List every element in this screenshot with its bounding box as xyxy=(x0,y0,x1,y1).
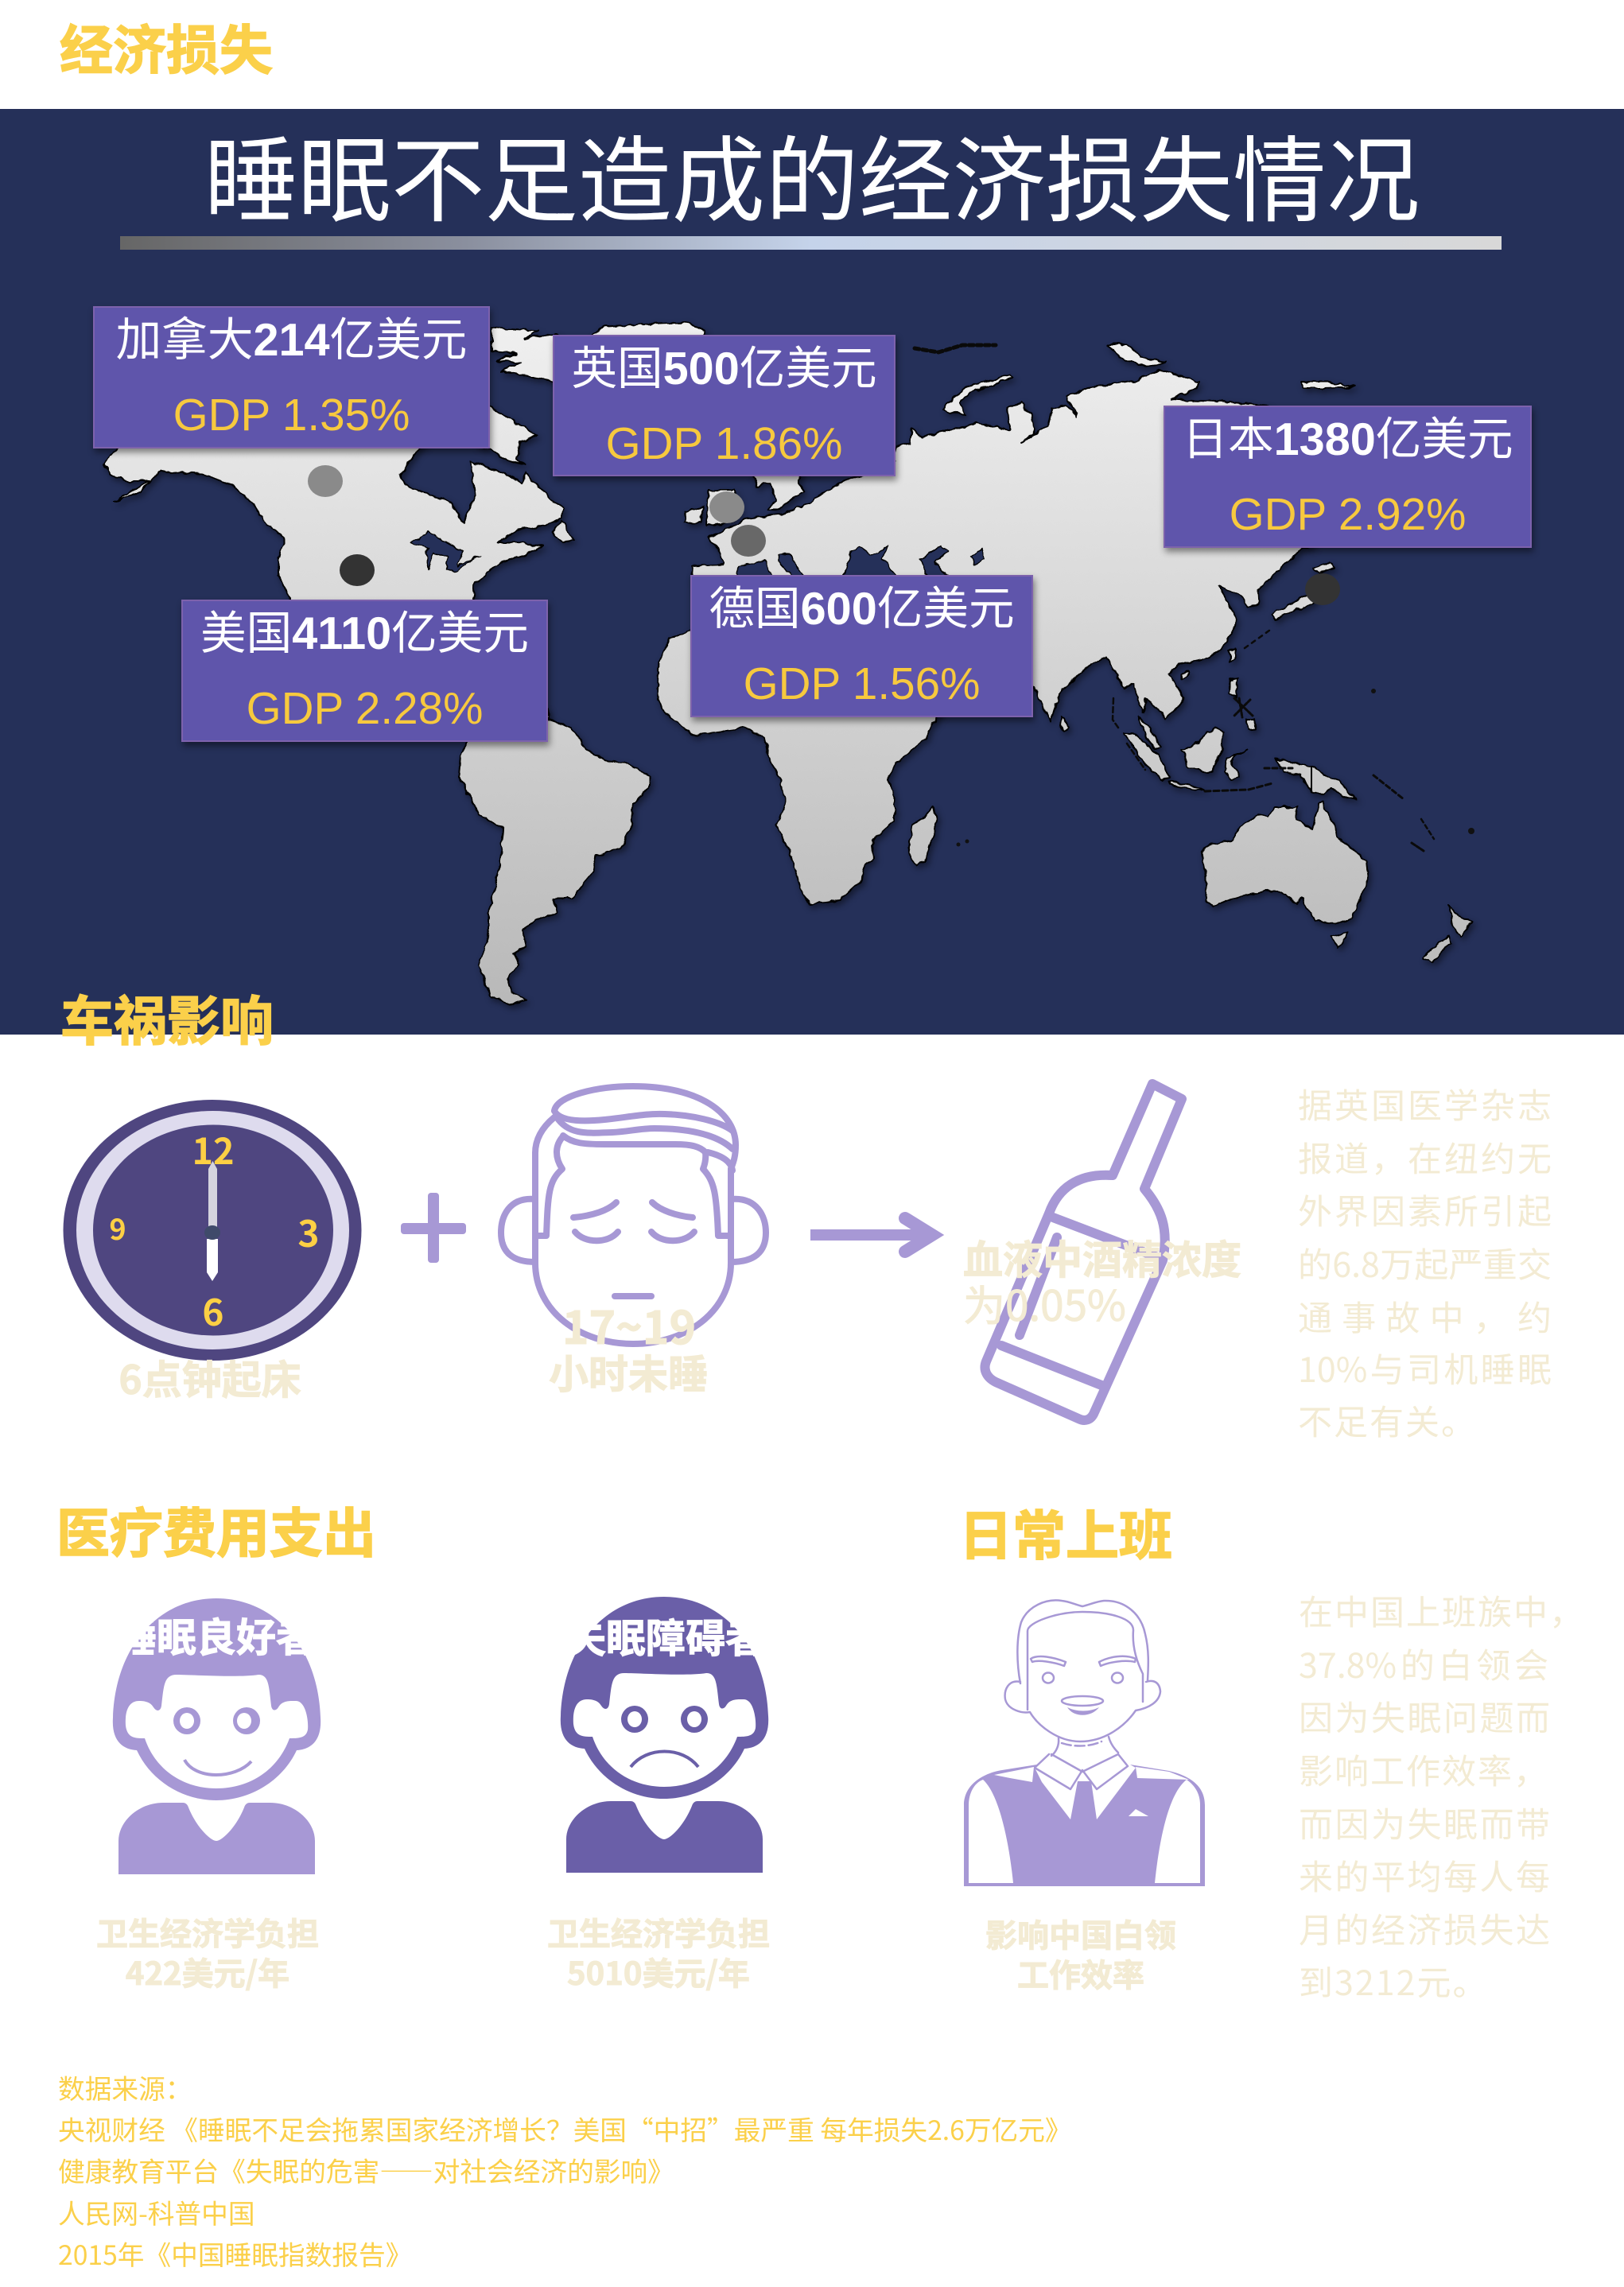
island: baffin xyxy=(477,406,538,465)
callout: japan: 日本1380亿美元 xyxy=(1182,414,1513,465)
continent: south america xyxy=(459,708,649,1004)
text block: british medical journal: 通事故中，约 xyxy=(1298,1291,1552,1341)
peninsula: malay xyxy=(1137,716,1160,749)
water: aral xyxy=(971,549,985,565)
icon: clock: 6 xyxy=(202,1284,224,1337)
text block: office workers: 因为失眠问题而 xyxy=(1299,1691,1550,1741)
label: office worker impact: 工作效率 xyxy=(1017,1950,1144,1996)
text block: office workers: 而因为失眠而带 xyxy=(1299,1798,1550,1847)
callout: germany xyxy=(690,575,1033,717)
continent: australia xyxy=(1202,802,1368,924)
callout: canada: 加拿大214亿美元 xyxy=(116,315,467,366)
callout: usa: 美国4110亿美元 xyxy=(200,608,529,659)
text: data sources heading: 数据来源： xyxy=(58,2068,192,2106)
text: source two: 健康教育平台《失眠的危害——对社会经济的影响》 xyxy=(58,2150,674,2189)
gradient divider bar xyxy=(120,236,1502,250)
label: hours awake number: 17~19 xyxy=(562,1292,696,1357)
callout: uk xyxy=(553,335,896,476)
island: new siberian xyxy=(1300,382,1356,388)
text block: british medical journal: 据英国医学杂志 xyxy=(1298,1079,1552,1128)
label: blood alcohol line two: 为0.05% xyxy=(963,1273,1126,1334)
icon: arrow xyxy=(810,1212,944,1258)
callout: uk: 英国500亿美元 xyxy=(571,344,877,394)
label: good sleeper cost: 422美元/年 xyxy=(126,1948,289,1994)
callout: japan: GDP 2.92% xyxy=(1230,489,1466,539)
small island dots xyxy=(956,689,1474,846)
label: blood alcohol line one: 血液中酒精浓度 xyxy=(963,1229,1241,1286)
water: black sea xyxy=(843,546,901,580)
water: caspian xyxy=(921,546,951,580)
label: office worker impact: 影响中国白领 xyxy=(985,1910,1176,1956)
border line: new guinea xyxy=(1311,766,1312,793)
island: severnaya xyxy=(1108,344,1166,367)
text block: office workers: 在中国上班族中， xyxy=(1299,1586,1585,1635)
continent: greenland xyxy=(491,328,557,382)
label: hours awake: 小时未睡 xyxy=(549,1343,708,1400)
label: insomniac: 失眠障碍者 xyxy=(566,1607,765,1664)
label: insomniac cost: 5010美元/年 xyxy=(567,1948,750,1994)
island: luzon xyxy=(1230,678,1237,697)
island chains: franz josef, indonesia, philippines, pacific xyxy=(915,345,1434,851)
label: office worker impact xyxy=(985,1910,1176,1996)
island: newfoundland xyxy=(552,521,574,542)
text: source three: 人民网-科普中国 xyxy=(58,2192,255,2231)
icon: wine bottle xyxy=(980,1079,1187,1425)
world map xyxy=(102,321,1476,1011)
icon: clock: 3 xyxy=(297,1206,320,1258)
text block: office workers xyxy=(1299,1586,1585,2005)
marker: germany xyxy=(731,525,766,557)
island: borneo xyxy=(1182,728,1223,773)
label: insomniac cost xyxy=(547,1908,770,1994)
callout: uk: GDP 1.86% xyxy=(606,418,842,468)
icon: tired face xyxy=(498,1083,769,1347)
marker: japan xyxy=(1305,573,1340,605)
marker: usa xyxy=(340,554,375,586)
heading: economic loss: 经济损失 xyxy=(60,8,273,85)
text block: office workers: 来的平均每人每 xyxy=(1299,1850,1550,1900)
text block: british medical journal: 10%与司机睡眠 xyxy=(1298,1343,1552,1392)
island: mindanao xyxy=(1246,718,1256,730)
island: new zealand south xyxy=(1423,936,1451,962)
icon: clock xyxy=(64,1100,361,1361)
heading: medical costs: 医疗费用支出 xyxy=(56,1491,376,1568)
island: ireland xyxy=(684,507,703,523)
icon: plus xyxy=(401,1193,466,1263)
marker: uk xyxy=(709,491,744,523)
continent: north america xyxy=(104,441,562,628)
water: mediterranean xyxy=(736,561,773,580)
peninsula: scandinavia xyxy=(751,469,806,509)
island: honshu xyxy=(1272,592,1324,620)
text block: british medical journal: 报道，在纽约无 xyxy=(1298,1132,1552,1182)
text block: british medical journal: 不足有关。 xyxy=(1298,1396,1477,1445)
island: sumatra xyxy=(1125,733,1169,779)
island: taiwan xyxy=(1230,648,1235,662)
island: tasmania xyxy=(1331,932,1346,948)
marker: canada xyxy=(308,465,343,497)
island: new guinea xyxy=(1276,759,1355,799)
callout: germany: 德国600亿美元 xyxy=(709,584,1015,635)
icon: insomniac xyxy=(560,1597,768,1873)
island: java xyxy=(1169,782,1205,791)
text block: office workers: 到3212元。 xyxy=(1299,1956,1488,2005)
island: madagascar xyxy=(908,806,937,864)
island: new zealand north xyxy=(1449,905,1472,937)
icon: clock: 12 xyxy=(192,1123,235,1175)
island: hokkaido xyxy=(1314,562,1334,574)
label: good sleeper cost: 卫生经济学负担 xyxy=(96,1908,319,1955)
island: arctic strip xyxy=(589,322,704,338)
text block: office workers: 月的经济损失达 xyxy=(1299,1904,1550,1953)
water: adriatic xyxy=(779,554,806,580)
icon: good sleeper xyxy=(113,1598,321,1874)
text block: british medical journal: 的6.8万起严重交 xyxy=(1298,1238,1552,1287)
callout: germany: GDP 1.56% xyxy=(744,658,980,709)
heading: daily work: 日常上班 xyxy=(959,1493,1172,1571)
label: good sleeper: 睡眠良好者 xyxy=(117,1606,316,1664)
text block: british medical journal xyxy=(1298,1079,1552,1445)
callout: usa: GDP 2.28% xyxy=(247,683,483,733)
island: hainan xyxy=(1182,672,1189,678)
continent: africa xyxy=(657,620,970,904)
text: source four: 2015年《中国睡眠指数报告》 xyxy=(58,2234,412,2273)
panel: world map background band xyxy=(0,109,1624,1035)
label: wake up at six: 6点钟起床 xyxy=(118,1349,301,1406)
island: sri lanka xyxy=(1060,716,1068,731)
text block: office workers: 37.8%的白领会 xyxy=(1299,1639,1548,1688)
island: novaya zemlya xyxy=(943,375,1013,415)
continent: eurasia xyxy=(691,370,1312,721)
icon: clock: 9 xyxy=(109,1207,126,1248)
callout: canada xyxy=(93,306,490,448)
island: great britain xyxy=(706,491,742,525)
label: insomniac cost: 卫生经济学负担 xyxy=(547,1908,770,1955)
heading: traffic accidents: 车祸影响 xyxy=(60,979,274,1056)
label: good sleeper cost xyxy=(96,1908,319,1994)
text block: office workers: 影响工作效率， xyxy=(1299,1745,1549,1794)
callout: canada: GDP 1.35% xyxy=(173,390,410,440)
callout: usa xyxy=(181,600,548,742)
title: 睡眠不足造成的经济损失情况 xyxy=(204,106,1420,241)
island: sulawesi xyxy=(1225,750,1248,779)
icon: office worker xyxy=(964,1599,1205,1886)
text block: british medical journal: 外界因素所引起 xyxy=(1298,1185,1552,1234)
text: source one: 央视财经 《睡眠不足会拖累国家经济增长？美国“中招”最严重 每年损失2.6万亿元》 xyxy=(58,2109,1072,2148)
water: great lakes xyxy=(410,532,480,570)
callout: japan xyxy=(1164,406,1532,548)
